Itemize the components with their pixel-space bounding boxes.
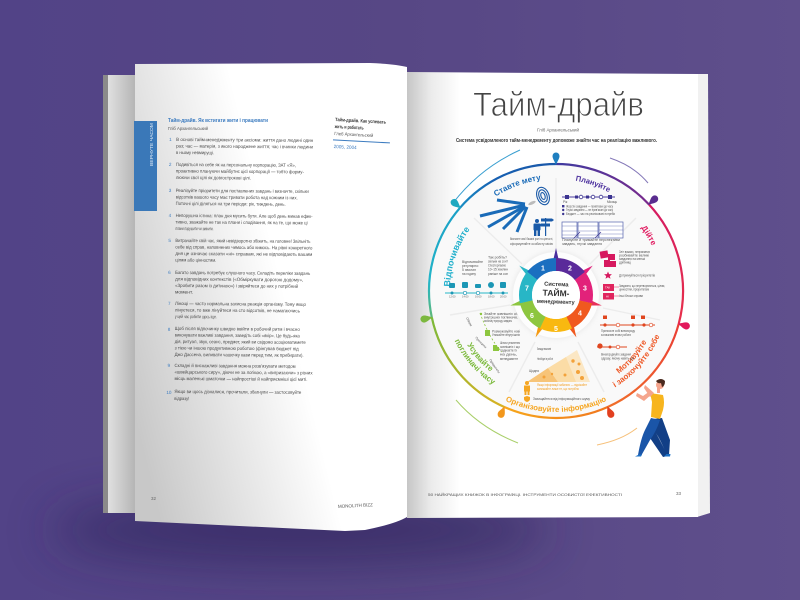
text block: numbered tips: 5 (168, 238, 171, 243)
sector 1: set a goal (480, 185, 554, 246)
sector 6: eliminate time eaters: зовнішніх і що (500, 345, 520, 349)
sector 6: eliminate time eaters: менеджмент (500, 357, 519, 361)
sector 1: set a goal: сформулюйте особисту місію (510, 242, 554, 246)
text block: numbered tips: Джо Дассена, виливати чашечку кави перед тим, як прибирати). (175, 352, 304, 358)
chart: circular time management wheel (420, 150, 690, 446)
text block: numbered tips: проактивно плануючи майбутнє цієї корпорації — тобто форму- (176, 168, 304, 174)
wheel centre label: Система (544, 282, 569, 288)
icon: shield (524, 396, 530, 402)
text block: numbered tips: Витрачайте свій час, який невідворотно збіжить, на головне! Звільніть (175, 237, 311, 244)
illustration: man pushing the wheel (635, 379, 670, 457)
centre wheel (510, 248, 602, 339)
sector 7: rest: 10–15 хвилин (488, 268, 508, 272)
sector 6: eliminate time eaters: Уникайте внутрішніх (492, 333, 520, 337)
sector 2: plan: Жорсткі завдання — прив'язані до часу (566, 204, 613, 208)
text block: numbered tips: відсотків вашого часу має тривати робота над кожним із них. (176, 195, 298, 200)
wheel centre label (537, 281, 576, 306)
text block: numbered tips: раз; час — матерія, з якого народжене життя; час і вчинки людини (176, 144, 313, 149)
text block: numbered tips: «швейцарського сиру», діючи не за логікою, а «вигризаючи» з різних (174, 368, 313, 375)
tags (603, 284, 619, 300)
tab: section label: ВЕРНУТЕ ЧАСОМ (149, 123, 154, 166)
wheel numbers: 4 (578, 310, 582, 318)
sector 6: eliminate time eaters: внутрішніх поглиначів, (484, 316, 518, 320)
sector 4: motivate: Винагороджуйте завдання (601, 352, 631, 356)
text block: numbered tips: відразу! (174, 396, 189, 401)
sector 5: organize information: Якщо інформації забагато — відсікайте (537, 383, 587, 387)
book shadow (50, 496, 550, 564)
page number left: 32 (151, 496, 157, 501)
sidebar: russian title and years (332, 116, 391, 153)
text block: numbered tips: 7 (168, 301, 171, 306)
sidebar: russian title and years: Глеб Архангельский (334, 130, 374, 138)
text block: numbered tips: Складні й виснажливі завдання можна розв'язувати методом (175, 362, 296, 369)
sector 7: rest: регулярно: (462, 264, 479, 268)
sector 7: rest: 14:00 (462, 294, 469, 298)
text block: numbered tips (166, 136, 315, 402)
sector 3: act (600, 250, 665, 300)
tab: section label (134, 121, 157, 211)
wheel numbers: 6 (530, 313, 534, 320)
sector 6: eliminate time eaters: Шляхи уникнення (500, 341, 520, 345)
sector 3: act: Інші блоки справи (619, 294, 643, 298)
wheel numbers: 2 (568, 266, 572, 272)
text block: numbered tips: «Зробити разом із дитиною») і звіряйтеся до них у потрібний (175, 282, 298, 289)
wheel centre label: ТАЙМ- (542, 287, 570, 298)
text block: numbered tips: 6 (168, 270, 171, 275)
tags: ТАК (605, 286, 610, 290)
sector 6: eliminate time eaters: Знайте зовнішніх або (484, 312, 520, 316)
icon: star (604, 272, 612, 279)
curved section headings: Ставте мету (494, 176, 540, 196)
icon: person orange (524, 381, 530, 395)
sector 5: organize information: Завжди важливі (537, 347, 551, 351)
sector 7: rest: Так робіть? (488, 256, 507, 260)
sector 6: eliminate time eaters: загальну природу завдань (484, 319, 512, 323)
text block: numbered tips: тивно, зважайте не так на плани і сподівання, як на те, що може ці (176, 219, 308, 225)
sector 2: plan: Плануйте й тримайте перспективи (562, 238, 620, 242)
panel: right page (407, 72, 698, 518)
pyramid chart (527, 350, 590, 382)
sector 7: rest (445, 256, 508, 298)
wheel numbers: 3 (583, 286, 587, 292)
sector 5: organize information: залишайте лише те, що потрібно (537, 387, 579, 391)
tags: НІ (606, 294, 609, 298)
sector 2: plan: Гнучкі завдання — не прив'язані до часу (566, 208, 613, 212)
sector 3: act: Дотримуйтеся пріоритетів (619, 274, 655, 278)
sector 3: act: розбивайте великі (619, 254, 649, 258)
text block: numbered tips: дія, ритуал, звук, сеанс, предмет, який ви свідомо асоціюватимете (175, 338, 306, 345)
sector 4: motivate: за важливі етапи роботи (601, 333, 631, 337)
text block: numbered tips: 3 (169, 188, 172, 193)
wheel segments (513, 252, 599, 338)
wheel centre label: менеджменту (537, 299, 576, 306)
wheel numbers (525, 266, 587, 333)
sector 4: motivate: одразу, якому навіть дні (601, 356, 634, 360)
curved section headings: і заохочуйте себе (612, 335, 660, 388)
sector 7: rest: 12:00 (449, 294, 456, 298)
sector 6: eliminate time eaters (465, 312, 520, 374)
curved section headings: поглиначі часу (454, 339, 496, 384)
curved section headings: Мотивуйте (616, 340, 646, 374)
curved section headings: Усувайте (467, 342, 492, 371)
text block: numbered tips: з тією чи іншою продуктивною роботою (фінгував бюджет під (175, 345, 299, 351)
text block: numbered tips: 4 (169, 213, 172, 218)
sector 3: act: Зліт важких, неприємних (619, 250, 650, 254)
sector 3: act: Завдання, що перетворюються, цілям, (619, 284, 665, 288)
icon: person at signpost (534, 218, 554, 236)
wheel numbers: 5 (554, 326, 558, 333)
sector 6: eliminate time eaters: на день, (500, 352, 517, 356)
sector 6: eliminate time eaters: Принципи (474, 336, 488, 349)
text block: numbered tips: Багато завдань потребує слушного часу. Складіть переліки завдань (175, 270, 311, 276)
sector 7: rest: на годину (462, 272, 476, 276)
text block: numbered tips: плани порушити чи змінити. (175, 226, 214, 231)
sector 5: organize information (524, 347, 590, 402)
text block: numbered tips: в ньому невмирущі. (176, 150, 214, 155)
sector 3: act: завдання на менші (619, 257, 645, 261)
curved section headings: Організовуйте інформацію (506, 396, 606, 413)
sector 7: rest: раніше на сон (488, 272, 508, 276)
shirt (650, 393, 664, 419)
sector 6: eliminate time eaters: Розмежовуйте нові (492, 330, 520, 334)
panel: book left page stack (103, 75, 136, 513)
sector 1: set a goal: Визначте свої бажані ролі та цінності, (510, 237, 553, 241)
sector 7: rest: Спостерігаємо (488, 264, 506, 268)
sector 5: organize information: Необхідні в роботі (537, 357, 553, 361)
back leg (653, 418, 670, 456)
sidebar: russian title and years: Тайм-драйв. Как успевать (335, 116, 386, 126)
page number right: 33 (676, 491, 682, 496)
heading: left page: Тайм-драйв. Як встигати жити і працювати (168, 117, 268, 124)
sector 4: motivate (597, 316, 655, 360)
outer faint arcs (453, 150, 648, 445)
sector 2: plan: Рік (563, 200, 568, 204)
text block: numbered tips: Реалізуйте пріоритети для поставлених завдань і визначте, скільки (176, 187, 309, 194)
icon: planner tables (562, 222, 623, 238)
author: Гліб Архангельський (537, 128, 580, 132)
wheel numbers: 7 (525, 286, 529, 292)
curved section headings: Дійте (640, 226, 656, 246)
sidebar: russian title and years: 2005, 2004 (333, 144, 357, 151)
icon: target (534, 185, 552, 207)
sector 6: eliminate time eaters: Пріоритети (488, 358, 501, 374)
sector 3: act: дрібниці (619, 260, 631, 264)
text block: numbered tips: Щоб після відпочинку швидко ввійти в робочий ритм і вчасно (175, 325, 300, 332)
text block: numbered tips: Якщо ви щось дізналися, прочитали, збагнули — застосовуйте (174, 388, 302, 395)
text block: numbered tips: себе від справ, наповнених чимось або кимось. На рівні конкретного (175, 245, 313, 250)
panel: right page stack (695, 74, 710, 517)
sector 7: rest: 5 хвилин (462, 268, 476, 272)
arrows fan (480, 200, 527, 232)
coloured rim arcs (429, 164, 683, 418)
sector 5: organize information: Щодня (529, 369, 539, 373)
sector 7: rest: скільки на сон? (488, 260, 508, 264)
icon: frogs and tasks (600, 250, 616, 267)
panel: left page (134, 63, 407, 531)
text block: numbered tips: виконувати важливі завдання, заведіть собі «якір». Це будь-яка (175, 332, 300, 338)
text block: numbered tips: місць маленькі шматочки — найпростіші й найприємніші цієї миті. (174, 375, 307, 382)
front leg (638, 418, 660, 456)
footer: publisher: MONOLITH BIZZ (338, 502, 373, 509)
sector 5: organize information: Захищайтеся від інформаційного шуму (533, 397, 590, 401)
curved section headings (444, 176, 660, 413)
sector 3: act: цінностям, пріоритетам (619, 288, 649, 292)
sector 7: rest: 16:00 (475, 294, 482, 298)
text block: numbered tips: у цей час робити щось іще. (175, 313, 217, 319)
text block: numbered tips: Лінощі — часто нормальна захисна реакція організму. Тому якщо (175, 301, 306, 307)
sidebar: russian title and years: жить и работать (334, 123, 364, 132)
sector 2: plan (562, 195, 623, 246)
text block: numbered tips: 2 (169, 162, 172, 167)
wheel numbers: 1 (541, 266, 545, 272)
text block: numbered tips: люючи свої цілі як довгострокові цілі. (176, 175, 251, 181)
subtitle: Система усвідомленого тайм-менеджменту допоможе знайти час на реалізацію важливого. (456, 137, 657, 144)
sector 6: eliminate time eaters: Обери (465, 317, 473, 327)
text block: numbered tips: Непорушна істина: план дня мусить бути. Але щоб день минав ефек- (176, 213, 313, 219)
curved section headings: Відпочивайте (444, 228, 470, 286)
sector 2: plan: Бюджет — час на реалізовані потреби (566, 212, 615, 216)
heading: left page (168, 117, 268, 131)
text block: numbered tips: В основі тайм-менеджменту три аксіоми: життя дано людині один (176, 136, 314, 143)
sector 7: rest: 18:00 (488, 294, 495, 298)
text block: numbered tips: 1 (169, 137, 172, 142)
text block: numbered tips: Подивіться на себе як на персональну корпорацію, ЗАТ «Я», (176, 162, 296, 168)
text block: numbered tips: 8 (168, 327, 171, 332)
head (656, 381, 664, 389)
text block: numbered tips: Поточні цілі діляться на три періоди: рік, тиждень, день. (176, 201, 286, 207)
sector 6: eliminate time eaters: ладнаєте їх (500, 348, 517, 352)
text block: numbered tips: цілям або цінностям. (175, 258, 216, 263)
heading: left page: Гліб Архангельський (168, 125, 208, 131)
text block: numbered tips: 10 (166, 390, 172, 395)
wheel tips (510, 248, 602, 338)
text block: numbered tips: для відповідних контекстів («Обміркувати дорогою додому», (175, 277, 303, 282)
footer: book series: 50 НАЙКРАЩИХ КНИЖОК В ІНФОГРАФІЦІ. ІНСТРУМЕНТИ ОСОБИСТОЇ ЕФЕКТИВНОСТІ (428, 492, 622, 497)
sector 2: plan: Місяць (607, 200, 618, 204)
sector 7: rest: Відпочивайте (462, 260, 483, 264)
rim markers (420, 152, 691, 419)
arms (636, 391, 652, 401)
title: Тайм-драйв (473, 86, 644, 124)
text block: numbered tips: момент. (175, 290, 193, 295)
sector 2: plan: завдань, гнучкі завдання (562, 242, 602, 246)
sector 4: motivate: Приносьте собі винагороду (601, 329, 635, 333)
sector 7: rest: 20:00 (500, 294, 507, 298)
text block: numbered tips: дня це означає сказати «ні» справам, які не відповідають вашим (175, 251, 312, 257)
curved section headings: Плануйте (576, 176, 610, 192)
text block: numbered tips: 9 (168, 363, 171, 368)
text block: numbered tips: лінуєтеся, то вже лінуйтеся на сто відсотків, не намагаючись (175, 306, 300, 313)
